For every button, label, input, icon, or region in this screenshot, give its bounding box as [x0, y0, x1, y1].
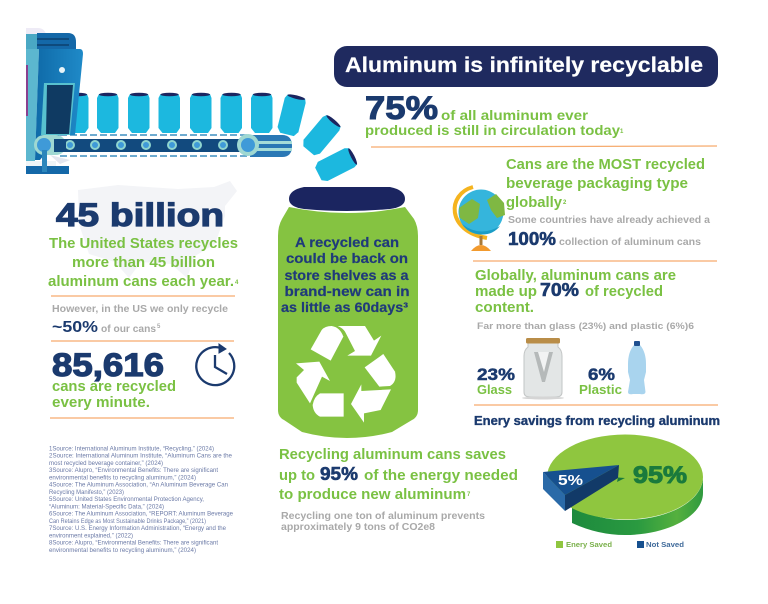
stat: 75% in circulation: of all aluminum ever [441, 107, 589, 123]
text block: most recycled packaging: globally [506, 195, 562, 211]
stat: 85,616 cans per minute: cans are recycled [52, 379, 176, 395]
can text: A recycled can [295, 235, 399, 250]
stat: 45 billion: The United States recycles [49, 236, 238, 252]
text block: most recycled packaging: Some countries have already achieved a [508, 215, 710, 226]
text block: 70% recycled content: made up [475, 284, 537, 300]
sources list: “Aluminum: Material-Specific Data,” (2024) [49, 504, 164, 510]
stat: plastic 6%: 6% [588, 365, 615, 384]
can text: could be back on [286, 251, 408, 266]
stat: 75% in circulation [365, 90, 624, 138]
text block: 95% energy: to produce new aluminum [279, 487, 466, 503]
text block: most recycled packaging: 100% [508, 229, 556, 249]
illustration: conveyor belt with cans [26, 28, 359, 278]
stat: ~50% recycled in the US: of our cans [101, 324, 156, 335]
stat: 75% in circulation: 75% [365, 90, 438, 126]
sources list: environment explained,” (2022) [49, 534, 133, 540]
legend [556, 540, 684, 549]
sources list: 8Source: Alupro, “Environmental Benefits: There are significant [49, 540, 218, 546]
faint map shape behind conveyor [78, 181, 237, 278]
text block: 95% energy: 95% [320, 464, 358, 484]
text block: 95% energy: approximately 9 tons of CO2e8 [281, 522, 435, 533]
sources list: Can Retains Edge as Most Sustainable Drinks Package,” (2021) [49, 519, 206, 525]
text block: 95% energy [279, 447, 518, 533]
sources list: 5Source: United States Environmental Protection Agency, [49, 497, 204, 503]
belt [35, 134, 293, 157]
slice: 5% not saved [543, 465, 625, 511]
can text: as little as 60days³ [281, 300, 408, 315]
sources list: 1Source: International Aluminum Institute, “Recycling,” (2024) [49, 446, 214, 452]
text block: 95% energy: Recycling one ton of aluminum prevents [281, 511, 485, 522]
stat: 85,616 cans per minute: 85,616 [52, 347, 164, 383]
sources list: 6Source: The Aluminum Association, “REPORT: Aluminum Beverage [49, 512, 234, 518]
title banner: Aluminum is infinitely recyclable [345, 54, 703, 77]
stat: 45 billion: 45 billion [56, 197, 224, 233]
icon: globe [455, 187, 505, 251]
stat: ~50% recycled in the US: 5 [157, 324, 161, 330]
panel: green recycled can [278, 187, 418, 438]
cans on belt [67, 93, 359, 183]
icon: recycle symbol [296, 326, 396, 423]
text block: 70% recycled content: Globally, aluminum cans are [475, 268, 676, 284]
sources list: 2Source: International Aluminum Institute, “Aluminum Cans are the [49, 454, 233, 460]
machine [26, 28, 83, 174]
icon: glass jar [522, 338, 564, 400]
stat: ~50% recycled in the US [52, 304, 229, 336]
text block: 95% energy: of the energy needed [364, 468, 518, 484]
icon: clock [196, 344, 234, 385]
sources list: 4Source: The Aluminum Association, “An Aluminum Beverage Can [49, 482, 228, 488]
sources list: 3Source: Alupro, “Environmental Benefits: There are significant [49, 468, 218, 474]
text block: most recycled packaging: 2 [563, 200, 567, 206]
stat: ~50% recycled in the US: ~50% [52, 319, 98, 336]
icon: plastic bottle [628, 341, 646, 394]
text block: 95% energy: 7 [467, 492, 471, 498]
stat: 45 billion: 4 [235, 280, 239, 286]
text block: 70% recycled content: Far more than glass (23%) and plastic (6%)6 [477, 321, 694, 332]
sources list [49, 446, 234, 554]
can text: store shelves as a [284, 268, 409, 283]
pie side wall [572, 477, 703, 535]
stat: glass 23%: Glass [477, 382, 512, 397]
stat: 75% in circulation: 1 [620, 129, 624, 135]
text block: most recycled packaging: Cans are the MOST recycled [506, 157, 705, 173]
sources list: most recycled beverage container,” (2024) [49, 461, 163, 467]
sources list: environmental benefits to recycling aluminum,” (2024) [49, 476, 196, 482]
text block: 95% energy: up to [279, 468, 315, 484]
stat: 45 billion [48, 197, 239, 290]
title banner [334, 46, 718, 87]
text block: most recycled packaging: collection of aluminum cans [559, 237, 701, 248]
legend: Enery Saved [566, 540, 612, 549]
can text: brand-new can in [284, 284, 410, 299]
text block: 70% recycled content: of recycled [585, 284, 663, 300]
stat: glass 23% [477, 365, 515, 397]
stat: 85,616 cans per minute: every minute. [52, 395, 150, 411]
sources list: Recycling Manifesto,” (2023) [49, 490, 124, 496]
text block: 95% energy: Recycling aluminum cans saves [279, 447, 506, 463]
stat: 45 billion: aluminum cans each year. [48, 274, 234, 290]
legend: Not Saved [646, 540, 684, 549]
label: 95%: 95% [633, 462, 687, 489]
text block: 70% recycled content: content. [475, 300, 534, 316]
text block: most recycled packaging: beverage packaging type [506, 176, 688, 192]
stat: 85,616 cans per minute [52, 347, 176, 411]
stat: 75% in circulation: produced is still in circulation today [365, 122, 620, 138]
stat: ~50% recycled in the US: However, in the US we only recycle [52, 304, 229, 315]
heading: energy savings: Enery savings from recycling aluminum [474, 414, 720, 428]
text block: 70% recycled content: 70% [540, 280, 579, 300]
text block: most recycled packaging [506, 157, 710, 249]
sources list: environmental benefits to recycling aluminum,” (2024) [49, 548, 196, 554]
slice: 95% saved [547, 434, 703, 520]
stat: plastic 6%: Plastic [579, 382, 622, 397]
stat: plastic 6% [579, 365, 622, 397]
can text [281, 235, 410, 315]
stat: glass 23%: 23% [477, 365, 515, 384]
stat: 45 billion: more than 45 billion [72, 255, 215, 271]
text block: 70% recycled content [475, 268, 694, 332]
label: 5%: 5% [558, 472, 583, 489]
pie chart: energy saved [543, 434, 703, 535]
sources list: 7Source: U.S. Energy Information Administration, “Energy and the [49, 526, 227, 532]
